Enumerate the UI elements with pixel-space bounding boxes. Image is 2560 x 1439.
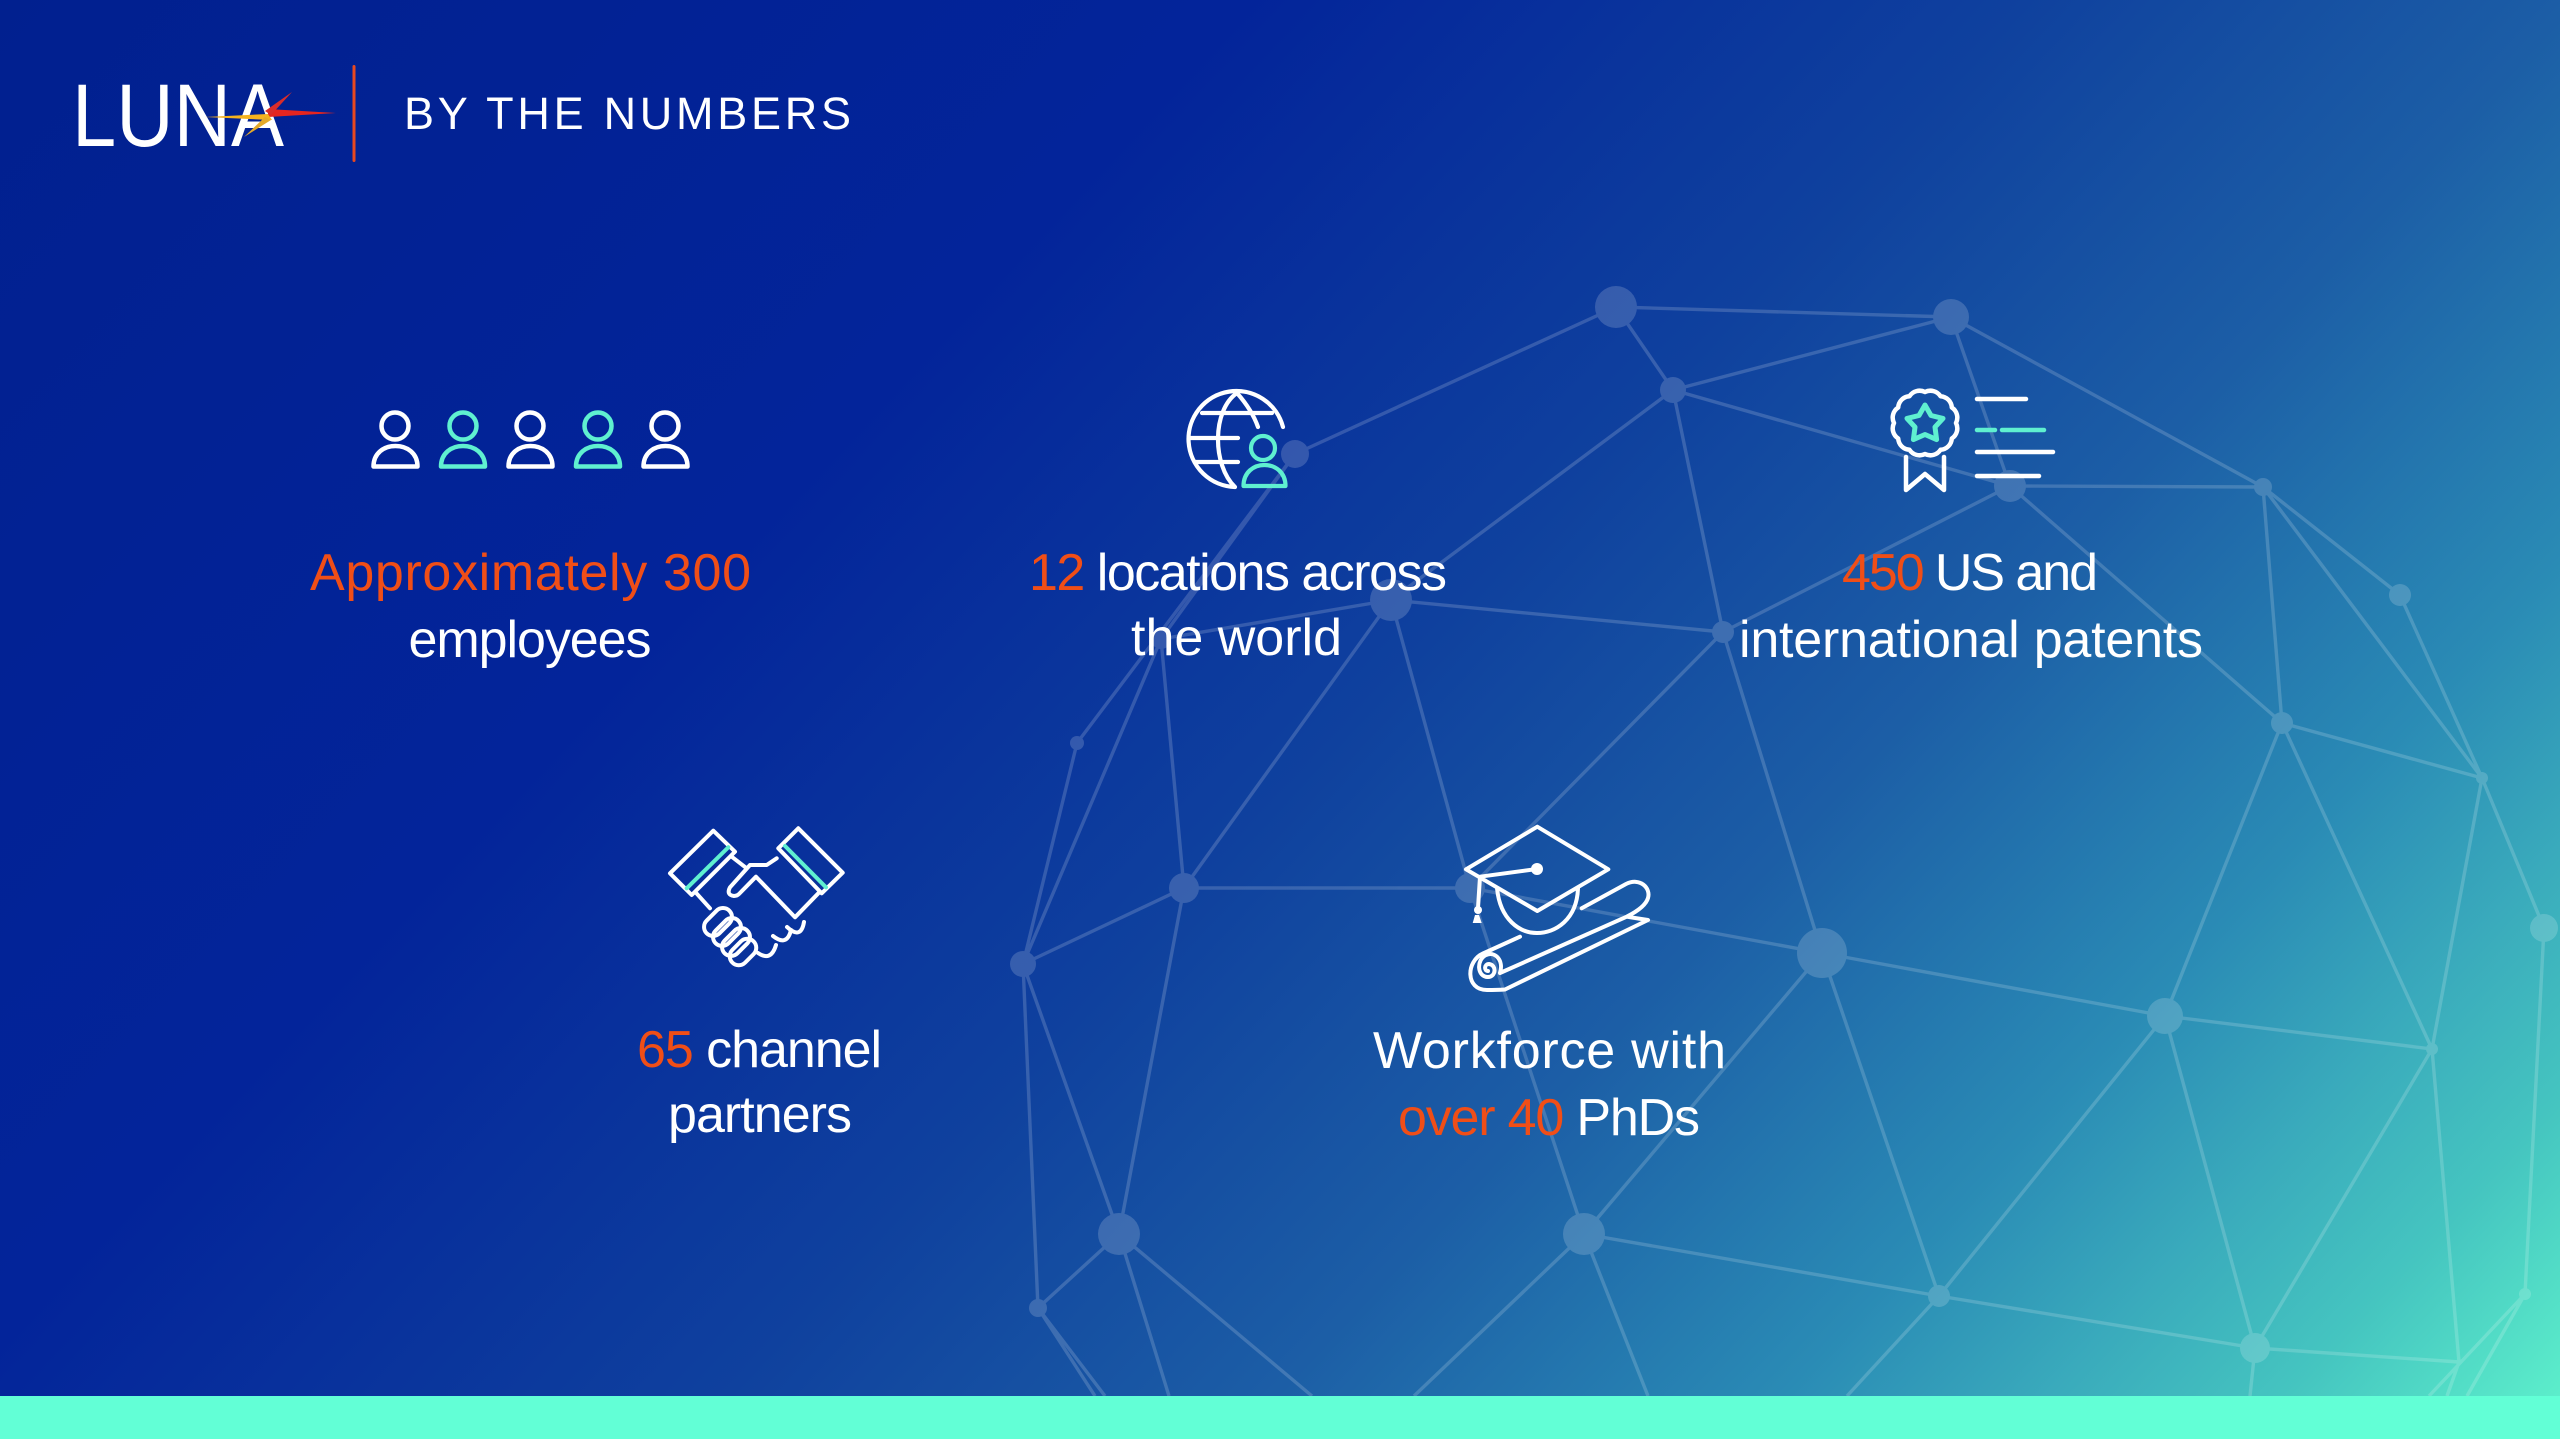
- header divider: [352, 65, 356, 162]
- patents text: international patents: [1739, 611, 2203, 669]
- icon: handshake: [670, 828, 843, 969]
- patents text: 450 US and: [1842, 544, 2098, 602]
- logo: [72, 65, 336, 165]
- icon: graduation cap and scroll: [1466, 827, 1648, 990]
- locations text: 12 locations across: [1029, 544, 1447, 602]
- PhDs text: [1373, 1022, 1726, 1147]
- bottom mint band: [0, 1396, 2560, 1439]
- panel: channel partners: [637, 828, 882, 1144]
- panel: patents: [1739, 391, 2203, 669]
- background network globe: [1010, 286, 2558, 1396]
- logo wordmark: LUNA: [72, 65, 285, 165]
- channel partners text: 65 channel: [637, 1021, 882, 1079]
- heading: BY THE NUMBERS: [404, 88, 851, 139]
- PhDs text: Workforce with: [1373, 1022, 1726, 1080]
- locations text: [1029, 544, 1447, 667]
- locations text: the world: [1131, 609, 1342, 667]
- employees text: Approximately 300: [310, 544, 751, 602]
- patents text: [1739, 544, 2203, 669]
- network lines: [1023, 307, 2544, 1396]
- icon: award ribbon and lines: [1893, 391, 2053, 490]
- PhDs text: over 40 PhDs: [1398, 1089, 1700, 1147]
- logo flare: [205, 92, 336, 137]
- channel partners text: partners: [668, 1086, 852, 1144]
- channel partners text: [637, 1021, 882, 1144]
- employees text: employees: [408, 611, 652, 669]
- employees text: [310, 544, 751, 669]
- header: [72, 65, 851, 165]
- panel: employees: [310, 412, 751, 669]
- network nodes: [1010, 286, 2558, 1365]
- icon: five people: [374, 412, 688, 466]
- panel: locations: [1029, 391, 1447, 667]
- panel: PhDs: [1373, 827, 1726, 1147]
- icon: globe with person: [1189, 391, 1286, 487]
